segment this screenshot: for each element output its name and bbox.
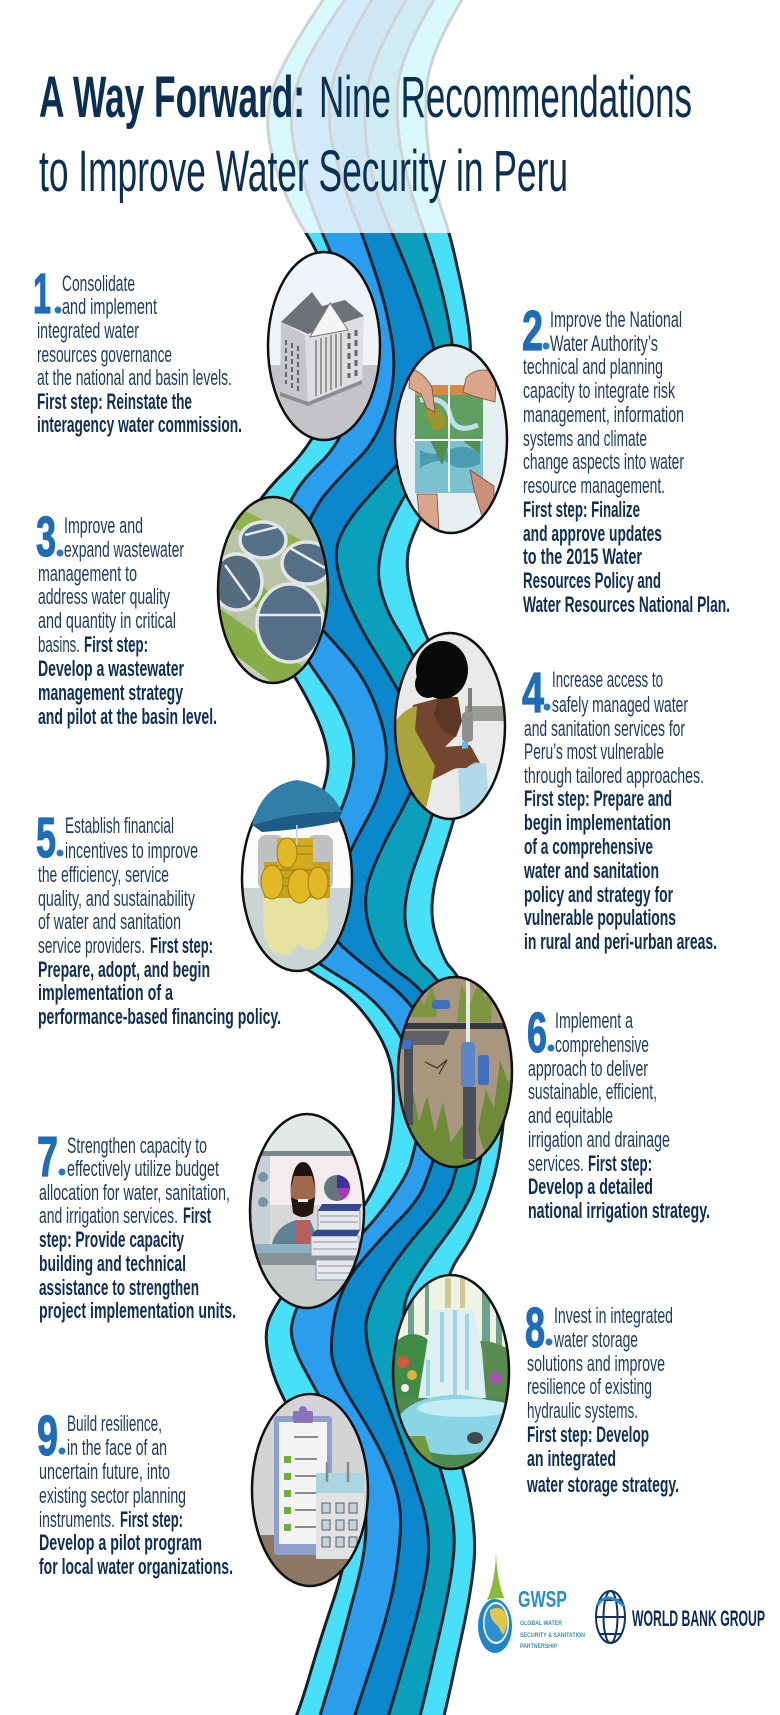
recommendation 3: 3 (36, 505, 56, 569)
recommendation 8: resilience of existing (527, 1374, 652, 1399)
recommendation 7: First (183, 1203, 211, 1228)
recommendation 2: capacity to integrate risk (523, 378, 676, 403)
recommendation 1: First step: Reinstate the (37, 389, 192, 414)
recommendation 7: effectively utilize budget (67, 1156, 219, 1181)
icon: hands assembling puzzle map (394, 344, 508, 534)
recommendation 8: hydraulic systems. (527, 1398, 638, 1423)
recommendation 6: Implement a (555, 1008, 633, 1033)
recommendation 2: to the 2015 Water (523, 544, 642, 569)
recommendation 2: change aspects into water (523, 449, 684, 474)
recommendation 3 (36, 505, 217, 729)
recommendation 3: Develop a wastewater (38, 656, 184, 681)
recommendation 7 (37, 1125, 236, 1323)
recommendation 4: water and sanitation (523, 858, 659, 883)
recommendation 8 (525, 1296, 679, 1497)
recommendation 1: Consolidate (62, 271, 135, 296)
recommendation 2: 2 (522, 299, 543, 363)
recommendation 6: First step: (588, 1151, 652, 1176)
recommendation 9: in the face of an (67, 1435, 167, 1460)
recommendation 6: sustainable, efficient, (528, 1079, 657, 1104)
recommendation 1: resources governance (37, 342, 172, 367)
recommendation 2: Improve the National (550, 307, 682, 332)
recommendation 4: vulnerable populations (524, 905, 676, 930)
recommendation 7: allocation for water, sanitation, (39, 1180, 230, 1205)
recommendation 3: expand wastewater (64, 537, 184, 562)
recommendation 7: building and technical (39, 1251, 186, 1276)
recommendation 4: Peru’s most vulnerable (524, 739, 664, 764)
recommendation 2: Water Authority’s (550, 331, 658, 356)
recommendation 2: systems and climate (523, 426, 647, 451)
recommendation 3: management to (38, 561, 137, 586)
title (39, 65, 692, 204)
icon: waterfall and forest pool (390, 1274, 514, 1473)
icon: person washing at a tap (389, 630, 510, 825)
recommendation 4: of a comprehensive (524, 834, 653, 859)
recommendation 6: approach to deliver (528, 1056, 648, 1081)
recommendation 4: and sanitation services for (524, 716, 685, 741)
recommendation 5: the efficiency, service (38, 862, 169, 887)
recommendation 7: step: Provide capacity (39, 1227, 184, 1252)
recommendation 4: begin implementation (524, 810, 671, 835)
recommendation 3: address water quality (38, 584, 170, 609)
recommendation 4 (522, 661, 717, 954)
recommendation 9: existing sector planning (39, 1483, 186, 1508)
icon: clipboard checklist and calendar (250, 1392, 370, 1588)
recommendation 5: of water and sanitation (38, 909, 181, 934)
recommendation 8: Invest in integrated (554, 1303, 673, 1328)
recommendation 6: irrigation and drainage (528, 1127, 670, 1152)
recommendation 7: assistance to strengthen (39, 1275, 199, 1300)
recommendation 9: uncertain future, into (39, 1459, 170, 1484)
recommendation 2: First step: Finalize (523, 497, 640, 522)
recommendation 1: at the national and basin levels. (37, 365, 232, 390)
faded river section behind title (0, 0, 780, 233)
recommendation 4: First step: Prepare and (524, 786, 672, 811)
icon: man on video call with books (248, 1112, 368, 1313)
recommendation 7: 7 (37, 1125, 58, 1189)
recommendation 7: project implementation units. (39, 1298, 236, 1323)
recommendation 9: instruments. (39, 1507, 115, 1532)
icon: GWSP globe water drop (478, 1553, 512, 1653)
recommendation 5 (36, 806, 281, 1029)
recommendation 8: First step: Develop (527, 1422, 649, 1447)
recommendation 5: quality, and sustainability (38, 886, 195, 911)
recommendation 2: resource management. (523, 473, 665, 498)
recommendation 6: 6 (527, 1001, 547, 1065)
recommendation 1: 1 (33, 262, 51, 326)
recommendation 8: water storage strategy. (526, 1472, 679, 1497)
recommendation 7: Strengthen capacity to (67, 1133, 207, 1158)
recommendation 9 (37, 1404, 233, 1579)
recommendation 8: an integrated (527, 1446, 616, 1471)
recommendation 3: Improve and (64, 513, 143, 538)
recommendation 2: management, information (523, 402, 684, 427)
icon: irrigation pipe in cracked soil (395, 975, 517, 1172)
recommendation 2: and approve updates (523, 521, 662, 546)
recommendation 8: solutions and improve (527, 1351, 665, 1376)
recommendation 6 (527, 1001, 710, 1223)
recommendation 9: 9 (37, 1404, 58, 1468)
recommendation 2 (522, 299, 730, 617)
recommendation 9: First step: (120, 1507, 183, 1532)
GWSP logo: SECURITY & SANITATION (520, 1633, 585, 1639)
recommendation 8: 8 (525, 1296, 545, 1360)
recommendation 2: Resources Policy and (523, 568, 661, 593)
recommendation 3: First step: (84, 632, 148, 657)
winding river of five bands (236, 0, 780, 1715)
recommendation 3: management strategy (38, 680, 183, 705)
recommendation 5: performance-based financing policy. (38, 1004, 281, 1029)
recommendation 6: comprehensive (555, 1032, 649, 1057)
recommendation 5: service providers. (38, 933, 145, 958)
title: A Way Forward: (39, 65, 305, 130)
recommendation 3: and pilot at the basin level. (38, 704, 217, 729)
recommendation 4: policy and strategy for (524, 882, 673, 907)
recommendation 1 (33, 262, 242, 437)
recommendation 5: First step: (150, 933, 213, 958)
recommendation 1: integrated water (37, 318, 139, 343)
recommendation 5: 5 (36, 806, 56, 870)
recommendation 5: implementation of a (38, 980, 173, 1005)
recommendation 8: water storage (553, 1327, 638, 1352)
recommendation 6: Develop a detailed (528, 1174, 653, 1199)
recommendation 6: services. (528, 1151, 584, 1176)
recommendation 2: technical and planning (523, 354, 663, 379)
recommendation 3: basins. (38, 632, 80, 657)
recommendation 4: Increase access to (552, 667, 663, 692)
recommendation 6: and equitable (528, 1103, 613, 1128)
GWSP logo: GWSP (518, 1586, 567, 1612)
recommendation 5: incentives to improve (65, 838, 198, 863)
GWSP logo: PARTNERSHIP (520, 1644, 557, 1650)
World Bank Group logo (596, 1591, 765, 1643)
icon: World Bank globe (596, 1591, 625, 1643)
GWSP logo (478, 1553, 585, 1653)
icon: coins under umbrella (238, 780, 356, 975)
recommendation 9: for local water organizations. (39, 1554, 233, 1579)
icon: government building (266, 250, 382, 442)
recommendation 1: and implement (62, 294, 157, 319)
recommendation 5: Prepare, adopt, and begin (38, 957, 210, 982)
recommendation 3: and quantity in critical (38, 608, 176, 633)
recommendation 1: interagency water commission. (37, 412, 242, 437)
recommendation 4: 4 (522, 661, 544, 725)
recommendation 9: Develop a pilot program (39, 1530, 202, 1555)
recommendation 4: safely managed water (552, 692, 688, 717)
recommendation 5: Establish financial (65, 813, 174, 838)
recommendation 7: and irrigation services. (39, 1203, 178, 1228)
icon: wastewater treatment tanks (212, 495, 335, 685)
recommendation 9: Build resilience, (67, 1411, 162, 1436)
GWSP logo: GLOBAL WATER (520, 1621, 563, 1627)
